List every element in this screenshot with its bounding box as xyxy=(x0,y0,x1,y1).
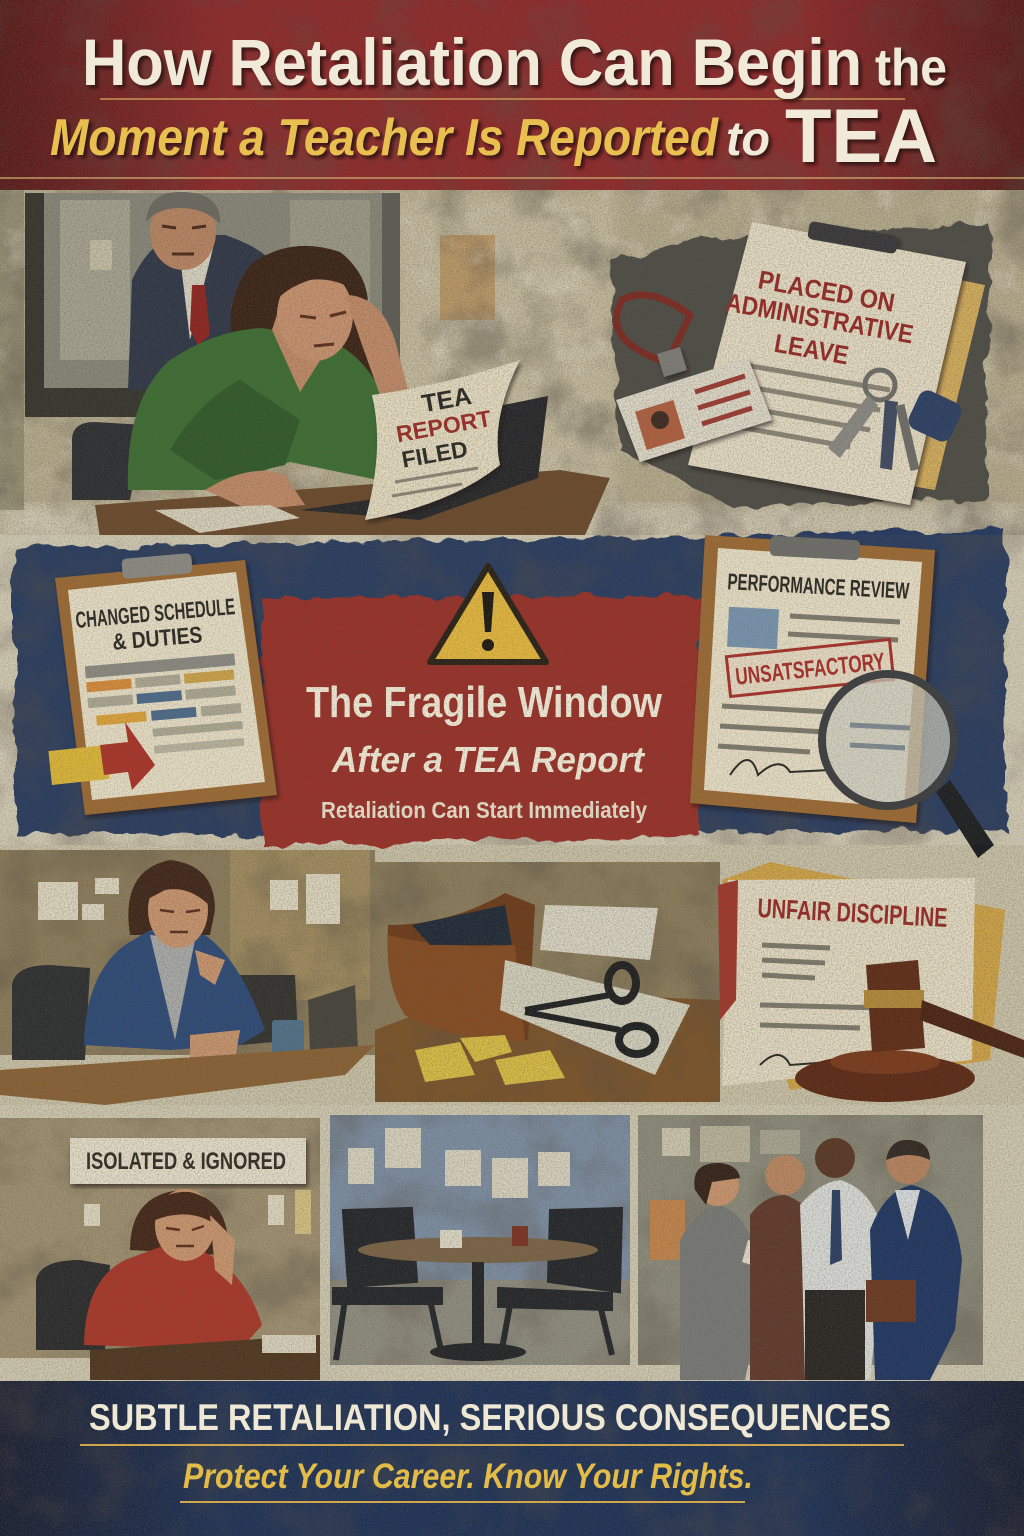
person: man in plaid xyxy=(750,1155,820,1380)
scene: worried teacher in office xyxy=(0,850,375,1105)
title line 2 xyxy=(50,94,937,179)
person: teacher in red xyxy=(84,1189,262,1350)
desk xyxy=(95,470,610,538)
footer tagline: Protect Your Career. Know Your Rights. xyxy=(183,1457,753,1496)
title line 2: to xyxy=(726,113,770,166)
clipboard: changed schedule xyxy=(55,553,277,815)
title line 1: the xyxy=(875,39,947,97)
clipboard document: LEAVE xyxy=(772,328,851,370)
paper: TEA report filed xyxy=(365,360,520,520)
subheading: After a TEA Report xyxy=(331,739,646,780)
heading: fragile window: The Fragile Window xyxy=(306,678,663,727)
panel: isolation row xyxy=(0,1105,1024,1385)
clipboard: performance review xyxy=(690,535,935,823)
panel: teacher reported xyxy=(0,188,1024,540)
keys xyxy=(828,370,965,470)
person: standing administrator xyxy=(128,192,285,390)
document: unfair discipline: UNFAIR DISCIPLINE xyxy=(757,893,948,933)
icon: warning triangle xyxy=(430,566,546,662)
sticky notes xyxy=(415,1035,565,1085)
clipboard: performance review: UNSATSFACTORY xyxy=(734,648,886,691)
clipboard document: ADMINISTRATIVE xyxy=(723,287,916,349)
scene: colleagues talking xyxy=(638,1115,983,1380)
arrow and sticky note xyxy=(48,722,155,790)
icon: gavel xyxy=(795,960,1024,1102)
icon: wallet xyxy=(388,893,535,1040)
scene: isolated teacher xyxy=(0,1118,320,1380)
person: stressed teacher in green xyxy=(128,246,408,510)
loose paper xyxy=(155,505,300,533)
icon: scissors xyxy=(525,965,655,1054)
label: isolated and ignored xyxy=(70,1138,306,1184)
chair xyxy=(72,422,145,500)
office window xyxy=(25,193,400,417)
paper: TEA report filed: TEA xyxy=(420,382,474,418)
paper: TEA report filed: REPORT xyxy=(394,405,493,447)
person: woman colleague xyxy=(680,1163,792,1380)
label: isolated and ignored: ISOLATED & IGNORED xyxy=(86,1148,286,1175)
clipboard: performance review: PERFORMANCE REVIEW xyxy=(727,568,910,604)
panel: consequences row xyxy=(0,845,1024,1110)
clipboard document xyxy=(688,221,966,505)
document: unfair discipline xyxy=(718,862,1005,1090)
clipboard: changed schedule: & DUTIES xyxy=(111,621,203,655)
scene: empty table xyxy=(330,1115,630,1365)
person: man in white shirt xyxy=(800,1138,885,1380)
paper stack xyxy=(540,905,658,960)
lanyard xyxy=(616,295,690,362)
footer banner xyxy=(0,1381,1024,1536)
title line 2: TEA xyxy=(785,94,937,179)
id badge xyxy=(616,347,772,462)
red center banner xyxy=(262,596,700,845)
dark brush stroke xyxy=(610,225,990,505)
scene: cut wallet and pay xyxy=(375,862,720,1102)
clipboard: changed schedule: CHANGED SCHEDULE xyxy=(74,593,236,633)
tagline: Retaliation Can Start Immediately xyxy=(321,797,647,823)
person: teacher in blue cardigan xyxy=(84,860,265,1062)
header banner xyxy=(0,0,1024,190)
panel: fragile window band xyxy=(0,530,1024,858)
title line 2: Moment a Teacher Is Reported xyxy=(50,109,719,167)
footer heading: SUBTLE RETALIATION, SERIOUS CONSEQUENCES xyxy=(89,1397,891,1438)
person: man in navy suit xyxy=(866,1140,962,1380)
icon: magnifying glass xyxy=(822,674,994,858)
paper: TEA report filed: FILED xyxy=(400,436,470,473)
back sheets xyxy=(700,240,985,490)
laptop xyxy=(300,396,548,520)
clipboard document: PLACED ON xyxy=(756,264,897,318)
title line 1: How Retaliation Can Begin xyxy=(82,25,862,99)
